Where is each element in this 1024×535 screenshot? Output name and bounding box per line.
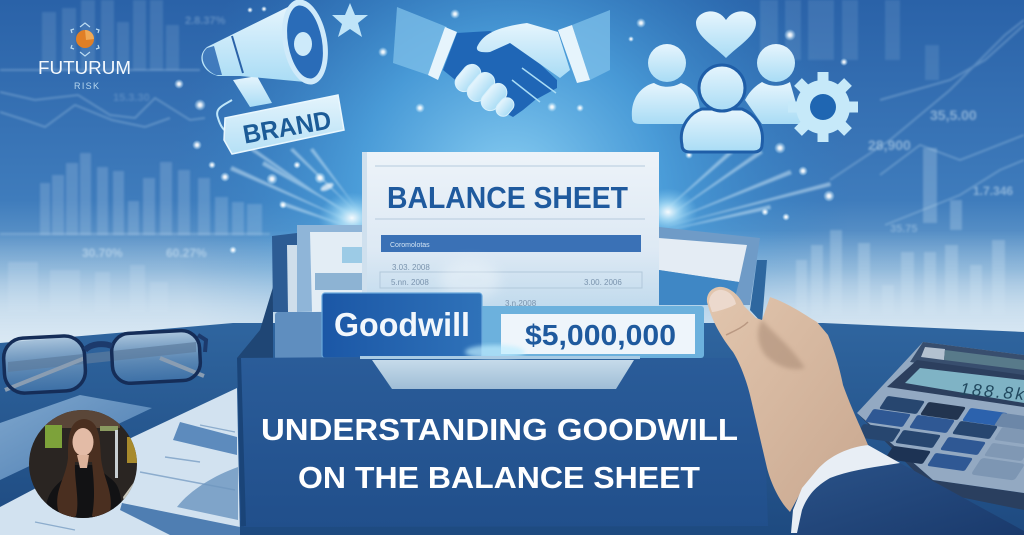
right sleeve	[572, 10, 610, 80]
icon: star	[332, 3, 368, 37]
shirt cuff	[791, 445, 900, 533]
notebook on desk	[0, 395, 152, 480]
horizon haze	[0, 230, 1024, 345]
logo wordmark: FUTURUM	[38, 58, 131, 78]
portrait photo	[29, 410, 137, 525]
background numbers: 60.27%	[166, 246, 207, 260]
thumb nail	[709, 290, 736, 312]
background numbers: 35,5.00	[930, 107, 977, 123]
centre person	[681, 65, 762, 152]
background numbers: 28,900	[868, 137, 911, 153]
value card	[501, 314, 695, 354]
blue header bar	[381, 235, 641, 252]
table rows: 3.03. 2008	[392, 263, 430, 272]
logo: Futurum Risk	[38, 23, 131, 91]
background numbers: 2.8.37%	[185, 15, 226, 27]
background numbers: 1.7.346	[973, 184, 1013, 198]
box notch	[372, 360, 634, 389]
calculator display: 188.8k	[959, 379, 1024, 404]
right cuff	[558, 25, 590, 83]
tag: Brand	[224, 95, 344, 154]
gear	[788, 72, 858, 142]
tab: Goodwill: Goodwill	[334, 306, 470, 343]
title: ON THE BALANCE SHEET	[298, 460, 700, 495]
background gradient	[0, 0, 1024, 345]
title: UNDERSTANDING GOODWILL	[261, 412, 738, 447]
palm shadow	[758, 320, 805, 369]
icon: people and heart	[632, 11, 858, 152]
left person	[632, 44, 700, 124]
glasses	[3, 330, 206, 394]
background bar charts	[8, 0, 1005, 315]
background numbers: 15.3.30	[113, 92, 150, 104]
icon: handshake	[393, 7, 610, 119]
blue header bar: Coromolotas	[390, 242, 430, 249]
document shadow band	[120, 503, 240, 535]
suit sleeve	[794, 463, 1024, 535]
body	[46, 465, 122, 518]
background numbers	[82, 15, 1013, 260]
white hand	[477, 23, 570, 78]
back divider tabs	[275, 306, 704, 360]
hand	[707, 287, 868, 512]
logo mark	[71, 23, 99, 56]
title	[261, 412, 738, 495]
value card: $5,000,000	[525, 320, 676, 352]
tag: Brand: BRAND	[241, 105, 333, 149]
face	[72, 428, 94, 456]
logo subtitle: RISK	[74, 81, 99, 91]
file box back and dividers	[237, 225, 767, 358]
heart	[696, 11, 756, 58]
document on desk	[0, 388, 240, 535]
central light rays	[230, 147, 831, 232]
calculator keys	[855, 396, 1024, 481]
table rows	[380, 263, 642, 308]
document heading: BALANCE SHEET	[387, 181, 628, 215]
blue hand	[443, 31, 557, 117]
table rows: 5.nn. 2008	[391, 278, 429, 287]
background numbers: 35.75	[890, 223, 918, 235]
left sleeve	[393, 7, 447, 75]
left cuff	[428, 27, 457, 80]
background line charts	[0, 20, 1024, 234]
tab: Goodwill	[322, 293, 482, 358]
hand holding box	[707, 287, 868, 512]
calculator	[855, 342, 1024, 510]
icon: megaphone	[201, 0, 334, 133]
box front panel	[237, 356, 768, 527]
balance sheet document	[362, 152, 659, 317]
document table band	[173, 422, 237, 455]
hair	[57, 419, 111, 518]
right person	[745, 44, 802, 124]
paper corner flares	[318, 188, 698, 244]
sparkles	[174, 6, 848, 254]
desk surface	[0, 323, 1024, 535]
table rows: 3.00. 2006	[584, 278, 622, 287]
background numbers: 30.70%	[82, 246, 123, 260]
background glow	[0, 0, 1024, 345]
fingers	[451, 61, 517, 119]
table rows: 3.n.2008	[505, 299, 537, 308]
calculator display	[887, 360, 1024, 407]
